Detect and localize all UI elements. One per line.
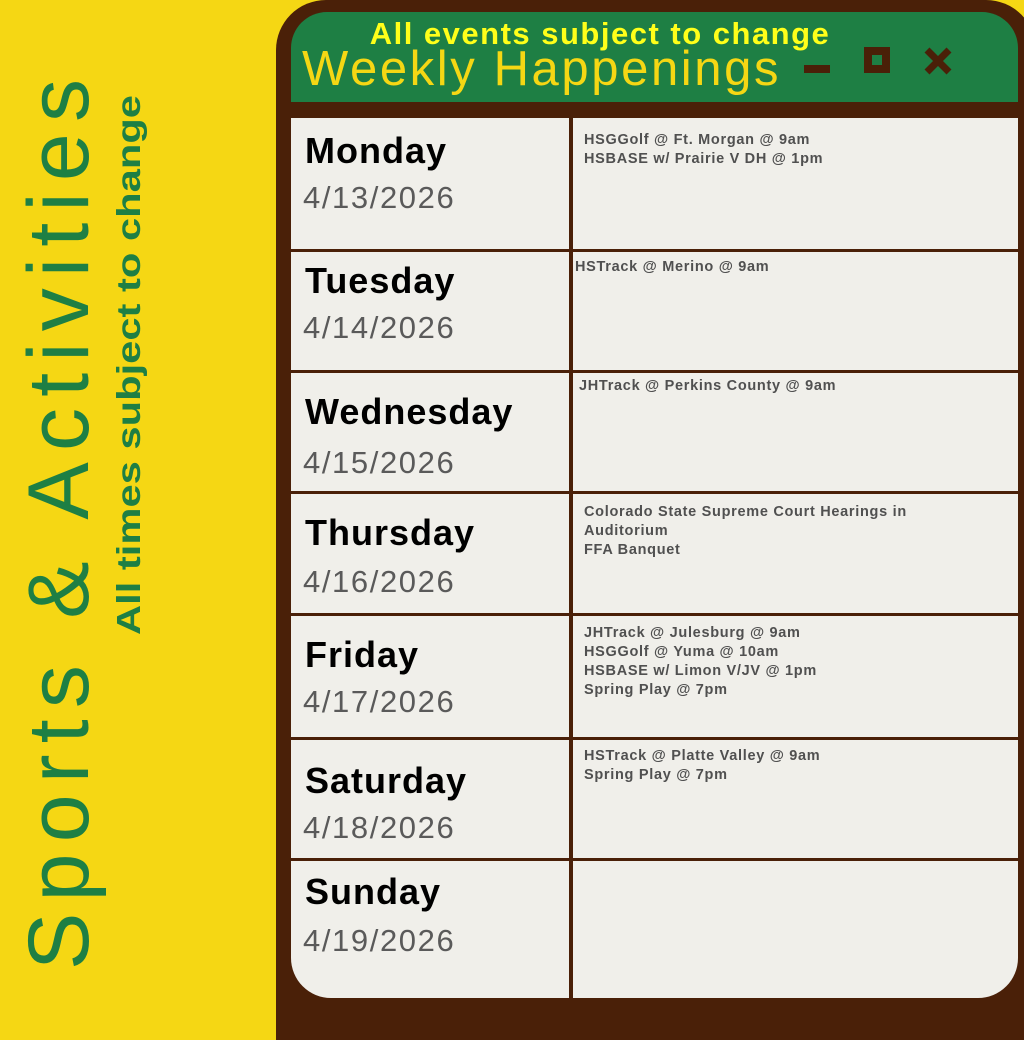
schedule table: HSGGolf @ Yuma @ 10am <box>584 644 779 660</box>
schedule table: JHTrack @ Perkins County @ 9am <box>579 378 836 394</box>
row: Sunday: 4/19/2026 <box>303 923 455 958</box>
row: Tuesday: Tuesday <box>305 260 455 301</box>
window icons <box>804 47 952 74</box>
header title: Weekly Happenings <box>302 42 781 96</box>
row: Monday: Monday <box>305 130 447 171</box>
row: Saturday <box>291 740 569 858</box>
header bar <box>291 12 1018 102</box>
row: Friday <box>291 616 569 737</box>
row: Tuesday <box>291 252 569 370</box>
schedule table: Spring Play @ 7pm <box>584 682 728 698</box>
row: Saturday: 4/18/2026 <box>303 810 455 845</box>
window frame <box>276 0 1024 1040</box>
side title: Sports & Activities: Sports & Activities <box>11 75 107 970</box>
schedule table: HSBASE w/ Prairie V DH @ 1pm <box>584 151 823 167</box>
row: Monday: 4/13/2026 <box>303 180 455 215</box>
schedule table: Colorado State Supreme Court Hearings in <box>584 504 907 520</box>
row: Monday <box>291 118 569 249</box>
schedule table: HSTrack @ Merino @ 9am <box>575 259 769 275</box>
row: Wednesday: Wednesday <box>305 391 513 432</box>
row: Sunday <box>291 861 569 998</box>
schedule table: HSBASE w/ Limon V/JV @ 1pm <box>584 663 817 679</box>
row: Thursday: Thursday <box>305 512 475 553</box>
row: Thursday <box>291 494 569 613</box>
row: Saturday: Saturday <box>305 760 467 801</box>
row: Tuesday: 4/14/2026 <box>303 310 455 345</box>
schedule table: Auditorium <box>584 523 668 539</box>
row: Thursday: 4/16/2026 <box>303 564 455 599</box>
schedule table: FFA Banquet <box>584 542 681 558</box>
schedule table: HSGGolf @ Ft. Morgan @ 9am <box>584 132 810 148</box>
side title: Sports & Activities: All times subject to change <box>110 95 147 635</box>
row: Sunday: Sunday <box>305 871 441 912</box>
schedule table: JHTrack @ Julesburg @ 9am <box>584 625 801 641</box>
row: Friday: 4/17/2026 <box>303 684 455 719</box>
row: Wednesday <box>291 373 569 491</box>
schedule table: HSTrack @ Platte Valley @ 9am <box>584 748 820 764</box>
header subtitle: All events subject to change <box>370 16 830 51</box>
schedule table: Spring Play @ 7pm <box>584 767 728 783</box>
row: Wednesday: 4/15/2026 <box>303 445 455 480</box>
row: Friday: Friday <box>305 634 419 675</box>
schedule table <box>291 118 1018 998</box>
